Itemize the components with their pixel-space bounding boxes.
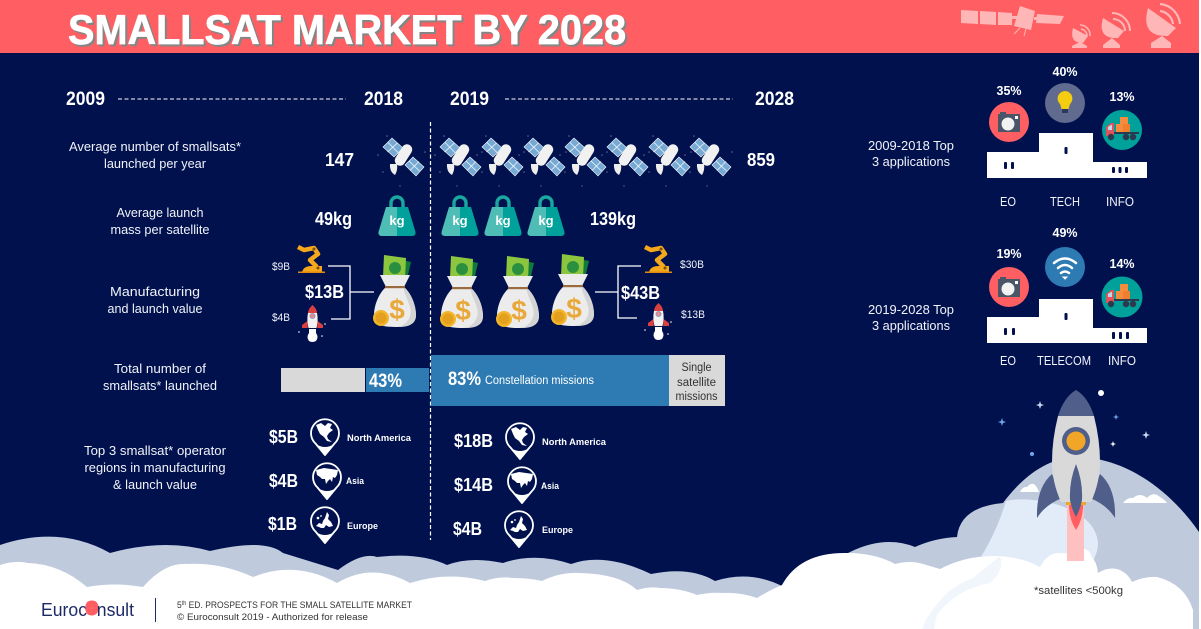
row: average number of smallsats: 147 — [325, 149, 354, 170]
panel: 2009-2018 top applications: 3 applications — [872, 154, 950, 169]
row: total number of smallsats launched: Constellation missions — [485, 375, 594, 387]
row: manufacturing and launch value: $ — [389, 294, 405, 325]
timeline header: 2028 — [755, 89, 794, 110]
title: SMALLSAT MARKET BY 2028 — [68, 6, 626, 53]
row: total number of smallsats launched: 83% — [448, 369, 481, 390]
panel: 2009-2018 top applications: 40% — [1052, 64, 1078, 79]
2019-2028 regions: Asia — [541, 481, 560, 492]
rocket fins — [1037, 474, 1115, 518]
2019-2028 regions: $18B — [454, 430, 493, 451]
row: total number of smallsats launched: Total number of — [114, 361, 206, 376]
icon: small dish — [1072, 25, 1090, 48]
row: average number of smallsats — [69, 135, 775, 187]
rocket illustration — [1037, 390, 1115, 561]
footer text — [177, 600, 412, 623]
2009-2018 regions: Europe — [347, 521, 378, 532]
timeline header: 2009 — [66, 89, 105, 110]
timeline header — [66, 89, 794, 110]
right edge strip — [1199, 0, 1201, 629]
2009-2018 regions: North America — [347, 433, 412, 444]
2009-2018 regions — [268, 419, 412, 544]
2019-2028 regions — [453, 423, 607, 548]
panel: 2009-2018 top applications: 13% — [1110, 89, 1135, 104]
row: total number of smallsats launched: satellite — [677, 377, 716, 389]
icon: satellite silhouette — [961, 6, 1064, 36]
2019-2028 regions: Europe — [542, 525, 573, 536]
footer text: © Euroconsult 2019 - Authorized for release — [177, 612, 368, 623]
icon: large dish — [1146, 4, 1180, 48]
2009-2018 regions: Asia — [346, 476, 365, 487]
row: average launch mass: kg — [452, 213, 468, 228]
row: total number of smallsats launched: 43% — [369, 371, 402, 392]
row: average launch mass: 49kg — [315, 208, 352, 229]
panel: 2019-2028 top applications: 49% — [1052, 225, 1078, 240]
icon: medium dish — [1102, 13, 1130, 48]
panel: 2019-2028 top applications: INFO — [1108, 353, 1136, 368]
row: total number of smallsats launched: smallsats* launched — [103, 378, 217, 393]
row: top 3 operator regions: regions in manufacturing — [84, 460, 226, 475]
row: average number of smallsats: launched per year — [104, 156, 207, 171]
light beam — [922, 499, 1098, 629]
logo: Euroconsult: Euroc — [41, 600, 88, 620]
row: average launch mass: 139kg — [590, 208, 636, 229]
panel: 2019-2028 top applications: 3 applications — [872, 318, 950, 333]
panel: 2009-2018 top applications: 2009-2018 Top — [868, 138, 954, 153]
row: top 3 operator regions — [84, 419, 607, 548]
row: manufacturing and launch value: $30B — [680, 259, 704, 271]
row: manufacturing and launch value: Manufacturing — [110, 284, 200, 299]
2009-2018 regions: $4B — [269, 470, 298, 491]
row: manufacturing and launch value: $13B — [305, 281, 344, 302]
header banner — [0, 0, 1199, 53]
row: manufacturing and launch value: $ — [566, 293, 582, 324]
panel: 2009-2018 top applications: EO — [1000, 194, 1016, 209]
2009-2018 regions: $1B — [268, 513, 297, 534]
panel: 2009-2018 top applications: 35% — [996, 83, 1022, 98]
row: manufacturing and launch value: $ — [511, 295, 527, 326]
row: top 3 operator regions: & launch value — [113, 477, 197, 492]
panel: 2009-2018 top applications: INFO — [1106, 194, 1134, 209]
footer divider — [154, 598, 156, 622]
2019-2028 regions: North America — [542, 437, 607, 448]
2009-2018 regions: $5B — [269, 426, 298, 447]
row: average number of smallsats: Average number of smallsats* — [69, 139, 241, 154]
row: top 3 operator regions: Top 3 smallsat* operator — [84, 443, 227, 458]
footnote: *satellites <500kg — [1034, 585, 1123, 597]
footer text: 5 — [177, 600, 182, 611]
row: manufacturing and launch value: $43B — [621, 282, 660, 303]
timeline header: 2018 — [364, 89, 403, 110]
clouds: back layer — [0, 457, 1199, 629]
row: manufacturing and launch value: $9B — [272, 261, 290, 273]
row: manufacturing and launch value — [108, 247, 705, 342]
rocket exhaust — [1067, 505, 1084, 561]
panel: 2019-2028 top applications: 19% — [996, 246, 1022, 261]
logo: Euroconsult: o — [87, 597, 97, 617]
2019-2028 regions: $4B — [453, 518, 482, 539]
row: total number of smallsats launched: missions — [676, 391, 718, 403]
row: manufacturing and launch value: $4B — [272, 312, 290, 324]
row: average number of smallsats: 859 — [747, 149, 775, 170]
row: manufacturing and launch value: and launch value — [108, 301, 202, 316]
panel: 2019-2028 top applications: EO — [1000, 353, 1016, 368]
logo: Euroconsult: nsult — [97, 600, 134, 620]
row: total number of smallsats launched — [103, 355, 725, 406]
clouds: front layer — [0, 549, 1193, 629]
row: average launch mass: Average launch — [116, 205, 204, 220]
row: average launch mass: mass per satellite — [110, 222, 210, 237]
center divider — [430, 122, 432, 540]
row: manufacturing and launch value: $ — [455, 295, 471, 326]
row: average launch mass: kg — [538, 213, 554, 228]
row: average launch mass — [110, 197, 636, 237]
row: average launch mass: kg — [389, 213, 405, 228]
panel: 2019-2028 top applications: 14% — [1110, 256, 1135, 271]
row: manufacturing and launch value: $13B — [681, 309, 705, 321]
panel: 2009-2018 top applications: TECH — [1050, 194, 1080, 209]
stars — [998, 390, 1150, 456]
panel: 2009-2018 top applications — [868, 64, 1147, 209]
timeline header: 2019 — [450, 89, 489, 110]
row: average launch mass: kg — [495, 213, 511, 228]
small clouds — [1020, 484, 1167, 503]
row: total number of smallsats launched: Single — [682, 362, 712, 374]
footer text: ED. PROSPECTS FOR THE SMALL SATELLITE MARKET — [186, 600, 412, 611]
2019-2028 regions: $14B — [454, 474, 493, 495]
panel: 2019-2028 top applications — [868, 225, 1147, 368]
rocket body — [1052, 416, 1100, 502]
footer text: th — [182, 601, 186, 607]
beam base over cloud — [922, 556, 1001, 629]
panel: 2019-2028 top applications: TELECOM — [1037, 353, 1091, 368]
panel: 2019-2028 top applications: 2019-2028 Top — [868, 302, 954, 317]
